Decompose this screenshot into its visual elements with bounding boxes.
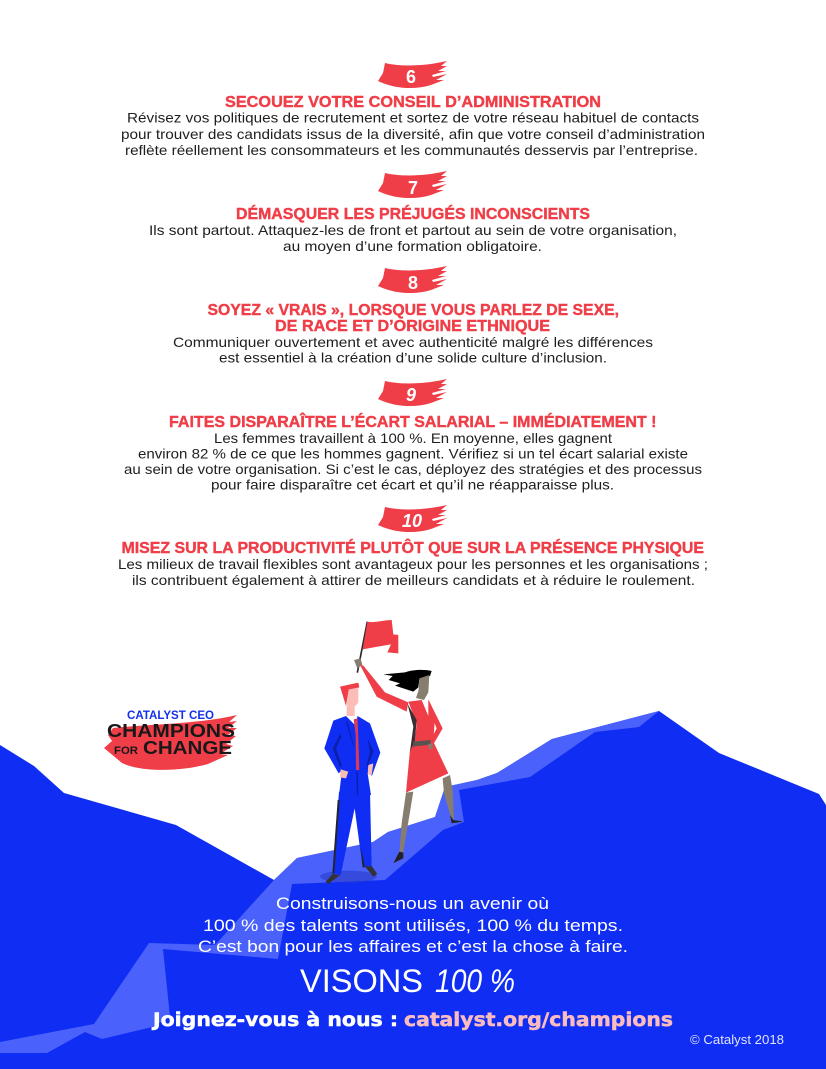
body 10: Les milieux de travail flexibles sont avantageux pour les personnes et les organisations ; [118, 556, 708, 572]
item 9: pay gap [124, 379, 702, 492]
item 6: board of directors [121, 61, 705, 158]
logo line 3 [114, 738, 232, 758]
slogan: visons 100 %: VISONS [300, 963, 423, 999]
mountain range [0, 711, 826, 1069]
logo: Catalyst CEO Champions for Change [104, 708, 237, 770]
call to action: Joignez-vous à nous : [151, 1010, 398, 1031]
brush badge 9 [378, 379, 447, 406]
shoes [326, 866, 377, 884]
logo line 3: FOR [114, 745, 138, 757]
call to action [151, 1010, 673, 1031]
body 6: Révisez vos politiques de recrutement et sortez de votre réseau habituel de contacts [127, 110, 699, 126]
body 6: reflète réellement les consommateurs et les communautés desservis par l’entreprise. [125, 142, 698, 158]
body 9: au sein de votre organisation. Si c’est le cas, déployez des stratégies et des processus [124, 461, 702, 477]
trousers [333, 792, 372, 875]
mountain silhouette [0, 711, 826, 1069]
number 9: 9 [406, 385, 416, 405]
body 8: Communiquer ouvertement et avec authenticité malgré les différences [173, 334, 653, 350]
body 10: ils contribuent également à attirer de meilleurs candidats et à réduire le roulement. [132, 572, 695, 588]
heading 8 [208, 302, 619, 335]
brush badge 8 [378, 266, 447, 293]
logo brush [104, 715, 237, 770]
brush badge 7 [378, 171, 447, 198]
slogan: visons 100 % [300, 963, 515, 999]
ground shadow [320, 871, 377, 883]
man in blue suit [320, 683, 380, 884]
logo line 3: CHANGE [143, 738, 232, 758]
body 9: pour faire disparaître cet écart et qu’il ne réapparaisse plus. [211, 476, 614, 492]
item 8: talk about gender and race [173, 266, 653, 366]
brush badge 6 [378, 61, 447, 88]
heading 6: SECOUEZ VOTRE CONSEIL D’ADMINISTRATION [225, 94, 601, 111]
heading 10: MISEZ SUR LA PRODUCTIVITÉ PLUTÔT QUE SUR LA PRÉSENCE PHYSIQUE [122, 539, 704, 557]
closing message: Construisons-nous un avenir où [276, 895, 549, 913]
body 8: est essentiel à la création d’une solide culture d’inclusion. [219, 350, 607, 366]
body 9: Les femmes travaillent à 100 %. En moyenne, elles gagnent [214, 430, 612, 446]
body 7 [149, 222, 677, 254]
call to action: catalyst.org/champions [404, 1010, 673, 1031]
body 9 [124, 430, 702, 492]
heading 9: FAITES DISPARAÎTRE L’ÉCART SALARIAL – IMMÉDIATEMENT ! [169, 413, 656, 431]
woman with flag [354, 620, 463, 863]
body 6 [121, 110, 705, 158]
trouser shading [332, 800, 365, 873]
logo line 1: CATALYST CEO [127, 708, 214, 722]
heading 8: SOYEZ « VRAIS », LORSQUE VOUS PARLEZ DE SEXE, [208, 302, 619, 319]
body 10 [118, 556, 708, 588]
hair [340, 683, 359, 706]
closing message [198, 895, 628, 956]
body 7: Ils sont partout. Attaquez-les de front et partout au sein de votre organisation, [149, 222, 677, 238]
body 7: au moyen d’une formation obligatoire. [283, 238, 542, 254]
heading 8: DE RACE ET D’ORIGINE ETHNIQUE [275, 318, 550, 335]
number 7: 7 [408, 178, 418, 198]
heading 7: DÉMASQUER LES PRÉJUGÉS INCONSCIENTS [236, 206, 590, 223]
copyright: © Catalyst 2018 [690, 1032, 784, 1047]
number 8: 8 [408, 273, 418, 293]
head [347, 687, 358, 716]
jacket [324, 716, 380, 796]
logo line 2: CHAMPIONS [107, 721, 235, 741]
number 10: 10 [402, 511, 422, 531]
flag [357, 620, 398, 673]
woman figure [354, 658, 463, 863]
closing message: 100 % des talents sont utilisés, 100 % du temps. [203, 917, 623, 935]
suit shading [333, 721, 373, 795]
closing message: C’est bon pour les affaires et c’est la chose à faire. [198, 938, 628, 956]
slogan: visons 100 %: 100 % [435, 963, 515, 999]
light climbing path [0, 711, 659, 1053]
body 6: pour trouver des candidats issus de la diversité, afin que votre conseil d’administration [121, 126, 705, 142]
hands [340, 763, 373, 778]
shirt [346, 716, 360, 772]
item 7: unconscious bias [149, 171, 677, 254]
body 9: environ 82 % de ce que les hommes gagnent. Vérifiez si un tel écart salarial existe [138, 446, 688, 462]
item 10: productivity [118, 505, 708, 588]
number 6: 6 [406, 67, 416, 87]
body 8 [173, 334, 653, 366]
brush badge 10 [378, 505, 447, 532]
tie [354, 718, 359, 770]
